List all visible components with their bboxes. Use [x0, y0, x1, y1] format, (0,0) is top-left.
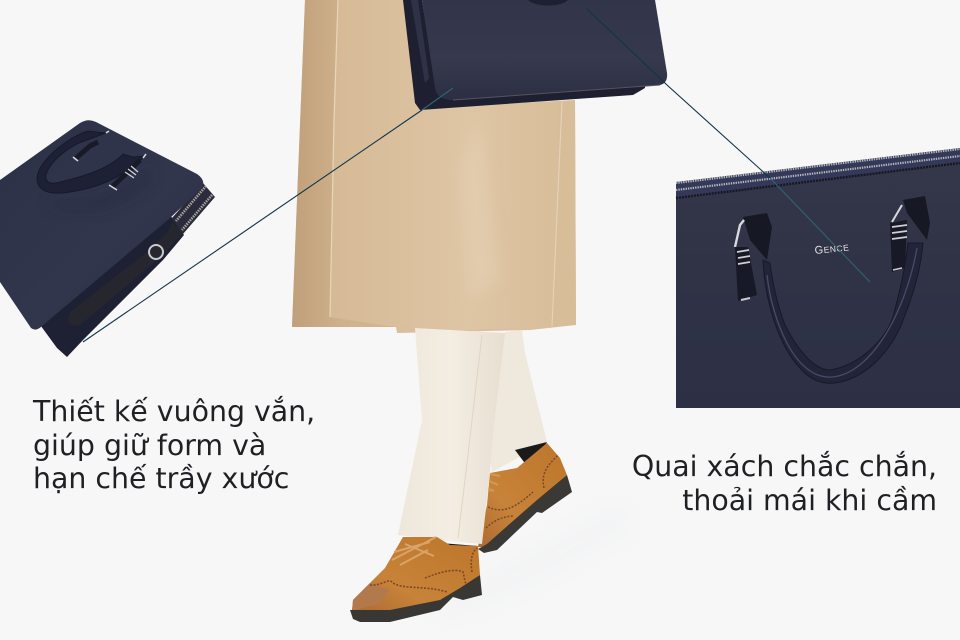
floor shadow — [430, 500, 640, 625]
back shoe — [478, 442, 572, 553]
front shoe — [350, 537, 482, 622]
handle — [763, 243, 923, 383]
callout line: left detail — [83, 88, 453, 342]
caption: left: giúp giữ form và — [33, 428, 266, 462]
front panel — [422, 0, 667, 100]
handle shadow — [50, 165, 150, 210]
logo: GENCE — [814, 241, 850, 257]
caption: right: thoải mái khi cầm — [682, 484, 937, 516]
D-ring — [149, 245, 163, 259]
back trouser leg — [486, 330, 547, 472]
hanging bag — [403, 0, 667, 110]
front trouser leg — [398, 328, 505, 544]
zipper — [172, 183, 215, 234]
coat — [292, 0, 576, 333]
caption: left: Thiết kế vuông vắn, — [33, 395, 315, 428]
front cover — [0, 120, 203, 330]
zipper band — [676, 148, 960, 199]
caption: left — [32, 395, 315, 495]
left clasp — [743, 213, 772, 260]
caption: right: Quai xách chắc chắn, — [632, 450, 937, 483]
callout line: right detail — [587, 9, 870, 282]
handle base — [528, 0, 568, 6]
caption: right — [632, 450, 937, 516]
left bag detail — [0, 120, 215, 357]
bag base — [38, 212, 184, 357]
side and base — [403, 0, 645, 110]
caption: left: hạn chế trầy xước — [33, 462, 289, 495]
right bag close-up — [676, 148, 960, 408]
side strap — [68, 222, 183, 326]
right clasp — [903, 196, 930, 240]
handle — [37, 131, 145, 193]
